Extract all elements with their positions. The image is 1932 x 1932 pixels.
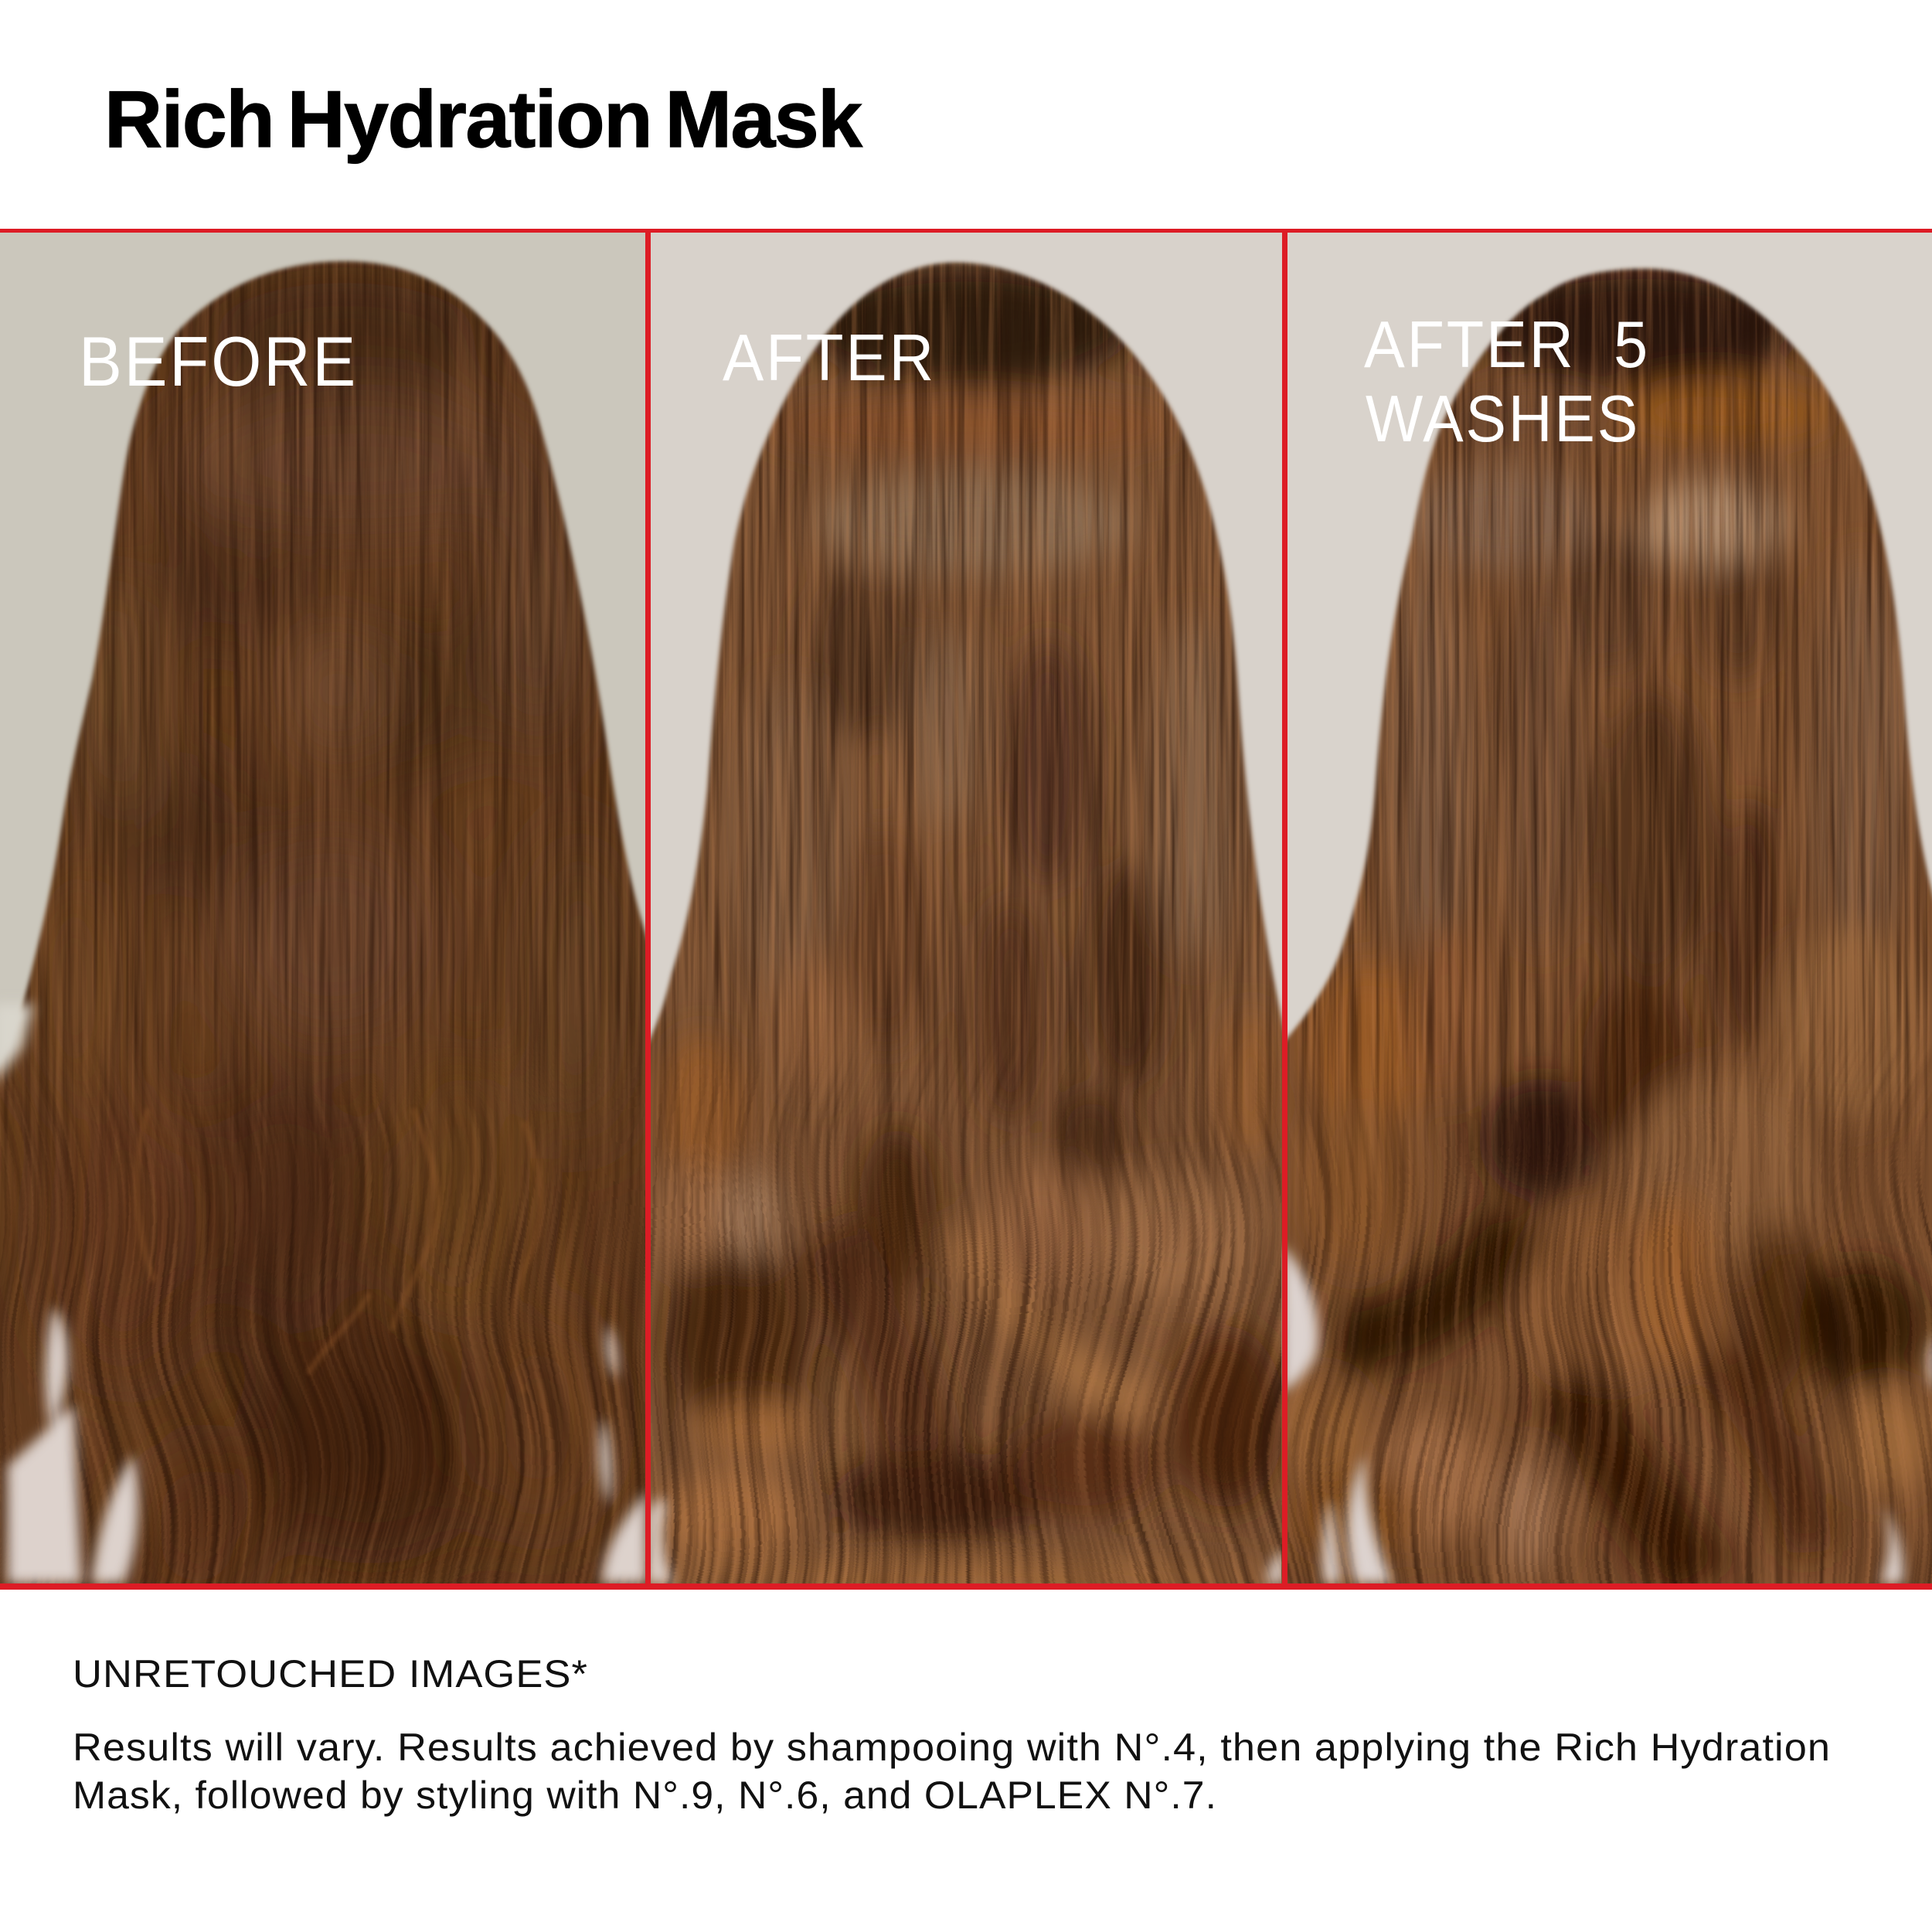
label: after 5 washes: WASHES (1366, 383, 1640, 456)
title: Rich Hydration Mask (104, 75, 862, 165)
panel: after photo (641, 230, 1294, 1602)
background gaps at lower edges (1281, 1244, 1932, 1583)
background gaps at lower corners (647, 1498, 1284, 1583)
hair silhouette: after 5 washes (1275, 247, 1932, 1602)
background gaps between lower strands (0, 1004, 647, 1583)
footnote text (73, 1726, 1831, 1817)
panel: before photo (0, 230, 659, 1614)
footnote text: Mask, followed by styling with N°.9, N°.6, and OLAPLEX N°.7. (73, 1774, 1217, 1817)
footnote text: Results will vary. Results achieved by shampooing with N°.4, then applying the Rich Hydration (73, 1726, 1831, 1769)
label: before: BEFORE (79, 323, 358, 401)
panel: after 5 washes photo (1275, 230, 1932, 1602)
footnote heading: UNRETOUCHED IMAGES* (73, 1652, 588, 1696)
label: after 5 washes (1364, 308, 1650, 456)
label: after 5 washes: AFTER 5 (1364, 308, 1650, 382)
hair silhouette: before (0, 247, 659, 1614)
panel frame: red rules (0, 229, 1932, 1590)
lighter wavy strands (137, 1109, 541, 1393)
label: after: AFTER (723, 321, 936, 395)
hair silhouette: after (641, 247, 1294, 1602)
